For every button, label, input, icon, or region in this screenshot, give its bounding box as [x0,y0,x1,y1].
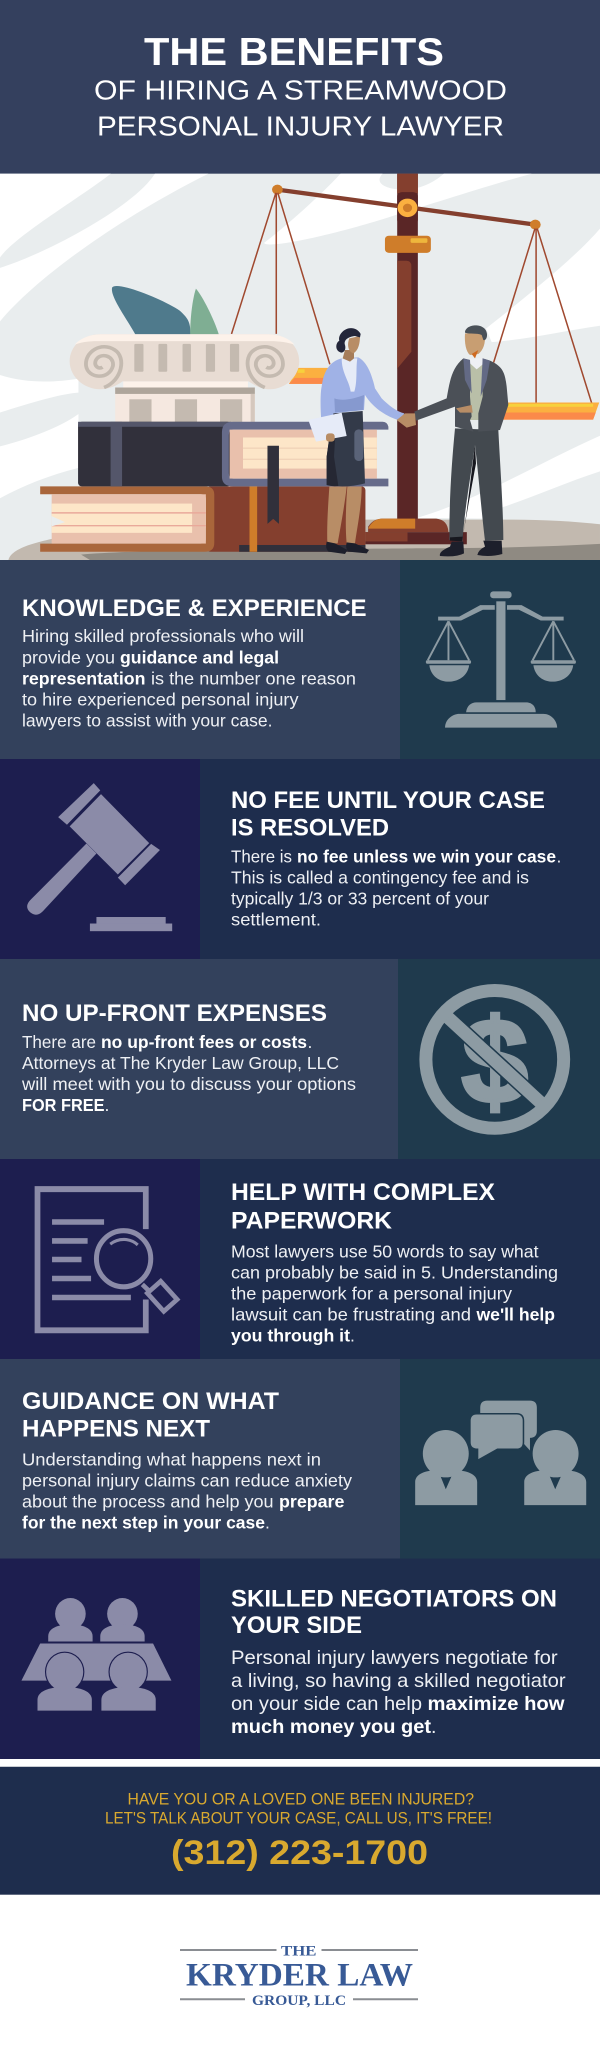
phone number: (312) 223-1700 [171,1834,428,1872]
text block: Most lawyers use 50 words to say what [231,1242,539,1262]
icon: no money: $ [462,996,528,1129]
logo: The Kryder Law Group, LLC [180,1944,418,2009]
text block: for the next step in your case [22,1512,265,1532]
text block: maximize how [428,1693,565,1715]
text block: the paperwork for a personal injury [231,1284,512,1304]
text block: lawyers to assist with your case. [22,710,272,730]
panel: knowledge and experience [0,560,600,759]
heading: NO FEE UNTIL YOUR CASE [231,787,545,814]
text block: guidance and legal [120,647,279,667]
text block: . [308,1032,312,1052]
heading: HELP WITH COMPLEX [231,1179,495,1206]
text block: settlement. [231,910,321,930]
plant leaves [112,286,219,335]
text block: There are [22,1032,96,1052]
panel: no up-front expenses [0,959,600,1159]
bookmark [267,446,279,524]
heading: GUIDANCE ON WHAT [22,1388,279,1415]
call to action panel [0,1766,600,1895]
heading: HAPPENS NEXT [22,1415,210,1442]
scale base [365,519,467,544]
text block: . [431,1716,436,1738]
text block: is the number one reason [151,668,356,688]
panel: complex paperwork [0,1159,600,1359]
text block: to hire experienced personal injury [22,689,299,709]
heading: YOUR SIDE [231,1612,362,1639]
text block: . [350,1325,355,1345]
woman [308,328,404,554]
text block: typically 1/3 or 33 percent of your [231,888,489,908]
man [414,325,508,556]
text block: can probably be said in 5. Understanding [231,1262,558,1282]
text block: This is called a contingency fee and is [231,867,529,887]
scale beam and pivot [272,185,541,253]
scale post [397,174,418,522]
text block: . [556,846,561,866]
text block [231,1647,566,1738]
handshake [397,413,416,428]
text block [231,1242,558,1345]
text block: personal injury claims can reduce anxiety [22,1470,352,1490]
text block: Attorneys at The Kryder Law Group, LLC [22,1053,339,1073]
logo: The Kryder Law Group, LLC: GROUP, LLC [252,1993,346,2009]
icon: gavel [27,783,172,931]
scale chains [232,193,592,403]
text block: we'll help [475,1304,555,1324]
text block: no fee unless we win your case [297,846,556,866]
text block: provide you [22,647,115,667]
text block: . [265,1512,270,1532]
heading: NO UP-FRONT EXPENSES [22,1000,327,1027]
heading: KNOWLEDGE & EXPERIENCE [22,595,367,622]
panel: skilled negotiators [0,1558,600,1759]
heading [231,1585,557,1639]
title: THE BENEFITS [144,31,444,74]
icon: no money [426,990,564,1129]
text block [22,1450,352,1532]
panel: no fee until resolved [0,759,600,959]
text block [231,846,561,930]
text block: Hiring skilled professionals who will [22,626,304,646]
header banner [0,0,600,174]
title: OF HIRING A STREAMWOOD [94,74,507,105]
text block: much money you get [231,1716,432,1738]
text block: Understanding what happens next in [22,1450,321,1470]
open-edge book [222,422,388,486]
text block: about the process and help you [22,1492,274,1512]
call to action text: HAVE YOU OR A LOVED ONE BEEN INJURED? [128,1790,474,1808]
bottom book [40,486,365,552]
heading: SKILLED NEGOTIATORS ON [231,1585,557,1612]
heading: PAPERWORK [231,1207,393,1234]
text block: no up-front fees or costs [101,1032,307,1052]
call to action text: LET'S TALK ABOUT YOUR CASE, CALL US, IT'S FREE! [105,1809,492,1827]
icon: negotiation table [21,1598,171,1711]
text block: prepare [279,1492,345,1512]
text block [22,626,356,730]
heading [22,1388,279,1442]
logo: The Kryder Law Group, LLC: KRYDER LAW [186,1958,413,1994]
logo: The Kryder Law Group, LLC: THE [281,1944,316,1960]
text block: lawsuit can be frustrating and [231,1304,471,1324]
column capital [70,334,299,423]
text block: . [104,1095,109,1115]
hero illustration: scales of justice, books, column and handshake [0,174,600,560]
text block: you through it [231,1325,350,1345]
text block: will meet with you to discuss your options [21,1074,356,1094]
text block: There is [231,846,292,866]
left scale pan [289,368,329,384]
text block: FOR FREE [22,1095,104,1115]
text block: representation [22,668,146,688]
right scale pan [497,402,599,420]
text block: on your side can help [231,1693,422,1715]
dark book [78,422,231,486]
heading [231,1179,495,1234]
icon: document with magnifier [37,1189,177,1330]
panel: what happens next [0,1359,600,1558]
call to action text [105,1790,492,1827]
title [94,31,507,142]
icon: scales of justice [426,591,576,728]
text block [21,1032,356,1115]
heading [231,787,545,842]
text block: Personal injury lawyers negotiate for [231,1647,558,1669]
heading: IS RESOLVED [231,814,389,842]
ground [8,520,600,560]
text block: a living, so having a skilled negotiator [231,1670,566,1692]
title: PERSONAL INJURY LAWYER [97,111,504,142]
icon: conversation [415,1401,586,1505]
stack of books [40,422,388,552]
